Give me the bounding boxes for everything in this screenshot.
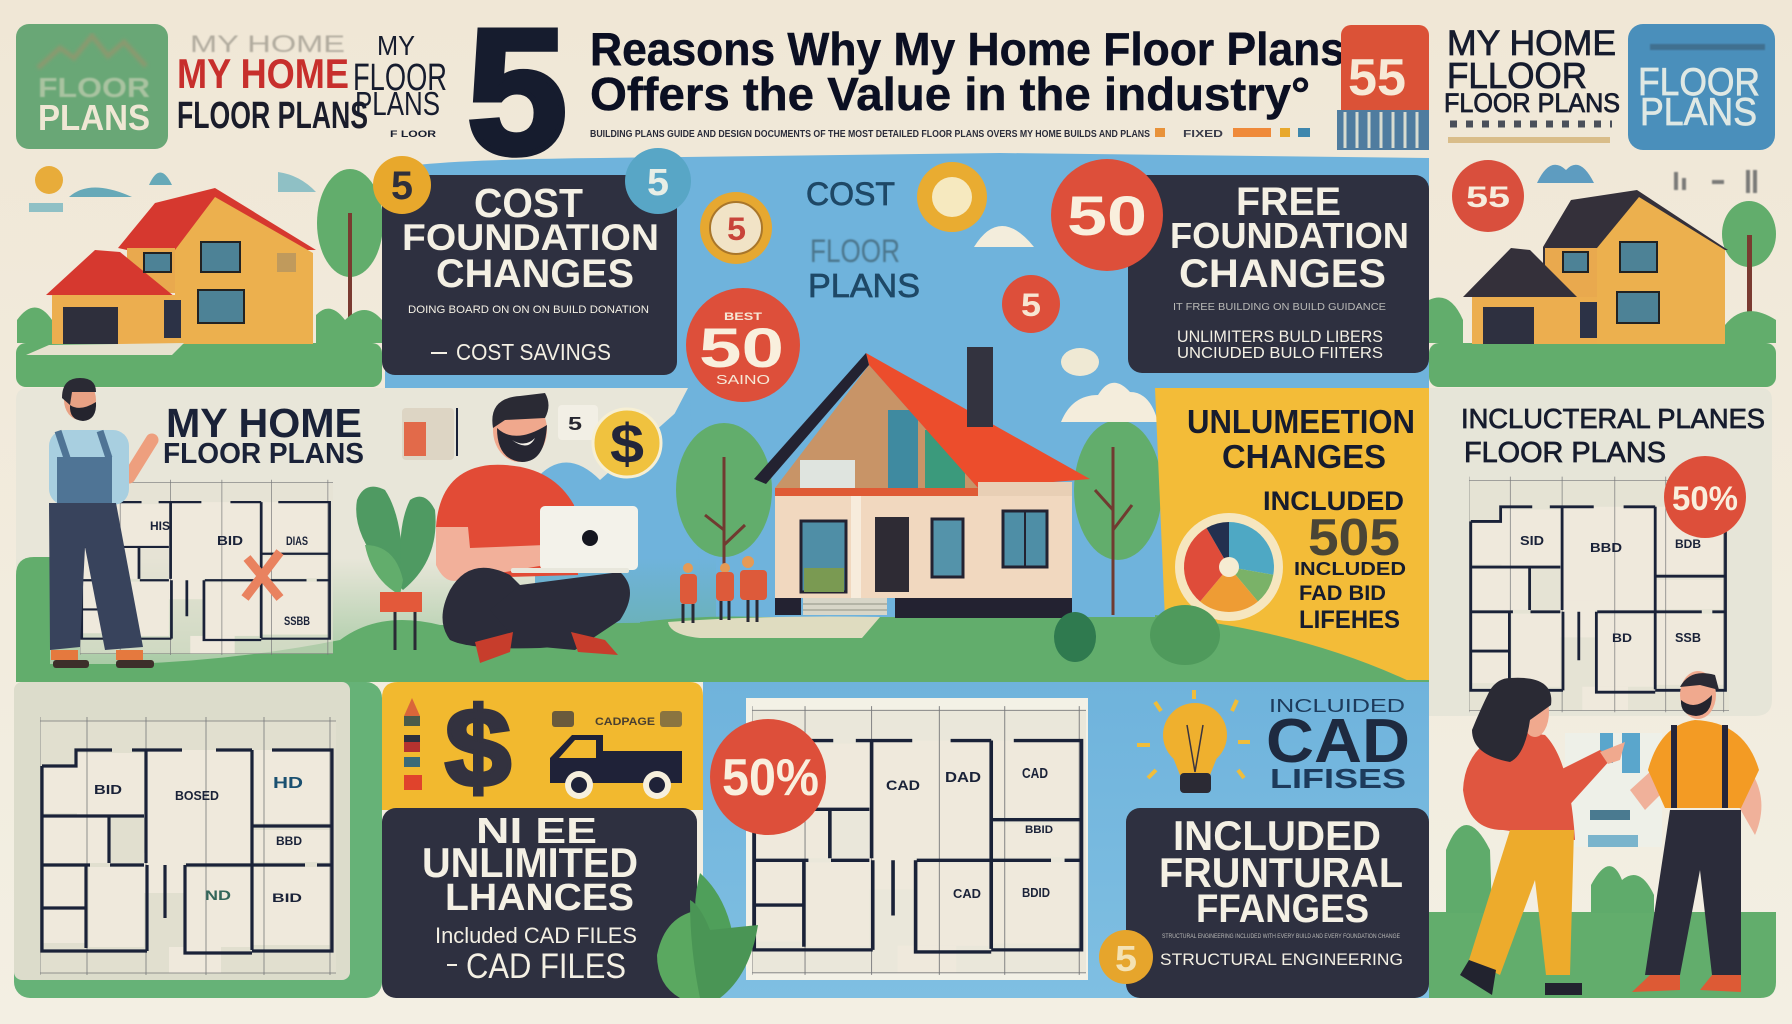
central sky panel: [385, 153, 1429, 682]
seated man with laptop: [436, 393, 638, 663]
floor plan: BDB: [1675, 537, 1701, 551]
dark panel: cost foundation changes: CHANGES: [436, 252, 634, 296]
dark panel: included structural changes: [1126, 808, 1429, 998]
red 55 badge: 55: [1466, 181, 1510, 214]
heading: cost floor plans: PLANS: [808, 267, 920, 304]
header logo: right wordmark: FLOOR PLANS: [1444, 88, 1620, 118]
icon: dollar coin: [593, 409, 661, 477]
cream cloud: [1061, 383, 1158, 422]
header logo: right wordmark: FLLOOR: [1447, 55, 1587, 96]
panel: couple reviewing plans: [1429, 671, 1776, 998]
speech bubble: [558, 405, 598, 440]
panel: unlimited changes yellow: CHANGES: [1222, 438, 1386, 475]
man in orange shirt: [1630, 671, 1761, 992]
title: [590, 23, 1345, 120]
header logo: my home floor plans wordmark: F LOOR: [390, 129, 437, 139]
panel: left house scene: [16, 166, 383, 387]
panel: large floor plan: HD: [273, 775, 303, 792]
badge: red 50 savings: BEST: [724, 311, 762, 323]
floor plan: [1469, 477, 1729, 712]
medal: gold 5: [700, 192, 772, 264]
floor plan: centre: CAD: [886, 777, 920, 793]
dark panel: cost foundation changes: COST: [474, 180, 583, 226]
badge: red 50 percent large: [710, 719, 826, 835]
small sky marks: [1676, 170, 1755, 193]
heading: cost floor plans: FLOOR: [810, 233, 900, 269]
title: Reasons Why My Home Floor Plans: [590, 23, 1345, 75]
bottom centre blue panel: [703, 682, 1429, 998]
header logo: my home floor plans wordmark: [177, 30, 447, 139]
badge: yellow 5: [373, 156, 431, 214]
floor plan: centre: DAD: [945, 769, 981, 786]
house illustration: [26, 188, 316, 355]
floor plan: SID: [1520, 533, 1544, 548]
floor plan with red cross: DIAS: [286, 534, 308, 548]
badge: red 5: [1002, 275, 1060, 333]
panel: large floor plan: BID: [272, 891, 302, 905]
panel: unlimited changes yellow: INCLUDED: [1263, 486, 1404, 516]
icon: light bulb: [1137, 690, 1250, 793]
header logo: my home floor plans wordmark: MY: [377, 30, 415, 61]
badge: blue 5: 5: [647, 162, 669, 204]
dark panel: included structural changes: FRUNTURAL: [1159, 849, 1403, 896]
red 55 badge: [1452, 160, 1524, 232]
badge: blue 5: [625, 148, 691, 214]
header logo: right wordmark: MY HOME: [1447, 24, 1616, 63]
woman in red sweater: [1460, 678, 1625, 995]
badge: red 50 savings: 50: [699, 316, 784, 379]
dark panel: cost foundation changes: DOING BOARD ON ON ON BUILD DONATION: [408, 304, 649, 316]
panel: large floor plan: BID: [94, 782, 122, 797]
icon: pickup truck: [550, 735, 682, 799]
badge: red 50: [1051, 159, 1163, 271]
dark panel: free foundation changes: IT FREE BUILDING ON BUILD GUIDANCE: [1173, 302, 1386, 313]
dark panel: unlimited changes: UNLIMITED: [422, 839, 638, 886]
heading: my home floor plans: [163, 400, 364, 470]
panel: unlimited changes yellow: [1155, 388, 1429, 680]
panel: unlimited changes yellow: UNLUMEETION: [1187, 403, 1415, 440]
heading: cost floor plans: [806, 176, 920, 304]
floor plan: centre: CAD: [953, 886, 981, 901]
dark panel: free foundation changes: [1128, 175, 1429, 373]
header logo: right wordmark: [1444, 24, 1620, 143]
heading: included cad files: [1266, 696, 1410, 794]
wall poster: [1565, 733, 1662, 847]
heading: included cad files: LIFISES: [1270, 763, 1406, 794]
dark panel: free foundation changes: FOUNDATION: [1170, 215, 1409, 256]
header badge: red 55 tile: 55: [1348, 49, 1406, 107]
header logo: my home floor plans wordmark: PLANS: [355, 85, 440, 122]
small label row: [552, 711, 682, 728]
title: Offers the Value in the industry°: [590, 68, 1310, 120]
heading: my home floor plans: FLOOR PLANS: [163, 438, 364, 470]
panel: large floor plan: [14, 682, 382, 998]
header logo: blue floor plans tile: [1628, 24, 1775, 150]
dark panel: free foundation changes: FREE: [1236, 180, 1341, 224]
house illustration: [1463, 190, 1728, 344]
floor plan: centre: [746, 698, 1088, 980]
bushes: [17, 308, 382, 343]
heading: included cad files: CAD: [1266, 707, 1410, 776]
dark panel: included structural changes: FFANGES: [1196, 887, 1369, 931]
panel: yellow cost icons: [382, 682, 703, 810]
dark panel: free foundation changes: UNCIUDED BULO FIITERS: [1177, 345, 1383, 362]
header logo: green floor plans tile: PLANS: [38, 97, 150, 138]
small label row: CADPAGE: [595, 716, 655, 728]
tree: right of house: [1074, 420, 1162, 615]
dark panel: cost foundation changes: FOUNDATION: [402, 217, 659, 258]
header badge: red 55 tile: [1337, 25, 1429, 150]
heading: cost floor plans: COST: [806, 176, 895, 212]
badge: red 50 savings: [686, 288, 800, 402]
panel: large floor plan: BOSED: [175, 788, 219, 803]
badge: yellow 5: 5: [391, 164, 413, 208]
icon: small clouds: [974, 226, 1099, 376]
badge: red 50 percent: [1664, 456, 1746, 538]
badge: gold 5: [1099, 930, 1153, 984]
floor plan: centre: BBID: [1025, 824, 1053, 836]
header logo: my home floor plans wordmark: FLOOR: [353, 57, 447, 99]
subtitle fine print: BUILDING PLANS GUIDE AND DESIGN DOCUMENTS OF THE MOST DETAILED FLOOR PLANS OVERS MY HOME BUILDS AND PLANS: [590, 128, 1150, 140]
bushes: [1429, 298, 1776, 343]
dark panel: unlimited changes: [382, 808, 697, 998]
header logo: my home floor plans wordmark: MY HOME: [177, 50, 349, 97]
badge: red 50: 50: [1067, 184, 1147, 247]
dark panel: free foundation changes: CHANGES: [1179, 252, 1386, 296]
dark panel: unlimited changes: Included CAD FILES: [435, 923, 637, 948]
panel: designer and laptop scene: [16, 378, 720, 682]
icon: large dollar: $: [445, 685, 511, 810]
floor plan: BBD: [1590, 540, 1622, 555]
dark panel: cost foundation changes: [382, 175, 677, 375]
floor plan with red cross: BID: [217, 533, 243, 548]
header logo: my home floor plans wordmark: MY HOME: [190, 31, 345, 58]
potted plant: [356, 487, 436, 650]
small sketch note: [402, 408, 458, 460]
header logo: green floor plans tile: [16, 24, 168, 149]
heading: included cad files: INCLUIDED: [1269, 696, 1405, 716]
floor plan with red cross: SSBB: [284, 614, 310, 628]
icon: gold sun: [917, 162, 987, 232]
badge: gold 5: 5: [1115, 938, 1137, 979]
panel: unlimited changes yellow: INCLUDED: [1294, 559, 1406, 579]
dark panel: included structural changes: STRUCTURAL ENGINEERING INCLUDED WITH EVERY BUILD AND EVERY FOUNDATION CHANGE: [1162, 934, 1400, 940]
header logo: blue floor plans tile: FLOOR: [1638, 61, 1760, 104]
central house illustration: [754, 347, 1090, 618]
badge: red 50 percent: 50%: [1672, 480, 1738, 518]
floor plan: SSB: [1675, 630, 1701, 645]
panel: right house scene: [1429, 160, 1776, 387]
floor plan with red cross: HIS: [150, 519, 170, 533]
dark panel: cost foundation changes: COST SAVINGS: [456, 339, 611, 365]
subtitle fine print: FIXED: [1183, 129, 1223, 140]
floor plan: BD: [1612, 631, 1632, 645]
badge: red 50 percent large: 50%: [722, 749, 819, 807]
cream path: [668, 617, 880, 638]
green hill and bushes: [1054, 605, 1411, 682]
panel: included floor plans: [1429, 388, 1772, 716]
panel: included floor plans: FLOOR PLANS: [1464, 437, 1666, 469]
badge: red 5: 5: [1021, 287, 1041, 323]
centre ground: [640, 617, 1429, 682]
panel: included floor plans: INCLUCTERAL PLANES: [1461, 403, 1765, 434]
man in overalls: [49, 378, 154, 668]
panel: unlimited changes yellow: FAD BID: [1299, 582, 1386, 605]
dark panel: unlimited changes: NI EE: [476, 810, 597, 851]
sky decorations: [29, 166, 316, 212]
dark panel: included structural changes: INCLUDED: [1173, 812, 1381, 859]
panel: large floor plan: ND: [205, 887, 231, 903]
dark panel: unlimited changes: CAD FILES: [466, 947, 626, 986]
group of small people: [680, 556, 767, 623]
floor plan: centre: CAD: [1022, 765, 1048, 782]
floor plan with red cross: [80, 480, 333, 655]
tree: left of house: [676, 423, 772, 570]
badge: red 50 savings: SAINO: [716, 372, 770, 387]
panel: unlimited changes yellow: 505: [1308, 509, 1400, 567]
tree: [317, 169, 383, 343]
dark panel: included structural changes: STRUCTURAL ENGINEERING: [1160, 950, 1403, 969]
dark panel: unlimited changes: LHANCES: [445, 877, 634, 919]
bushes: [1446, 825, 1654, 913]
header logo: my home floor plans wordmark: FLOOR PLANS: [177, 95, 368, 137]
icon: dollar coin: $: [610, 412, 644, 475]
heading: my home floor plans: MY HOME: [166, 400, 362, 446]
floor plan: centre: BDID: [1022, 885, 1050, 900]
dark panel: free foundation changes: UNLIMITERS BULD LIBERS: [1177, 327, 1383, 346]
panel: large floor plan: BBD: [276, 834, 302, 848]
leafy plant: [657, 873, 758, 998]
tree: [1722, 201, 1776, 343]
pie chart: [1175, 513, 1283, 621]
header logo: blue floor plans tile: PLANS: [1640, 91, 1757, 134]
icon: color stack: [404, 698, 422, 790]
header logo: green floor plans tile: FLOOR: [38, 72, 150, 103]
medal: gold 5: 5: [727, 211, 746, 247]
speech bubble: 5: [568, 414, 582, 434]
panel: unlimited changes yellow: LIFEHES: [1299, 606, 1400, 634]
